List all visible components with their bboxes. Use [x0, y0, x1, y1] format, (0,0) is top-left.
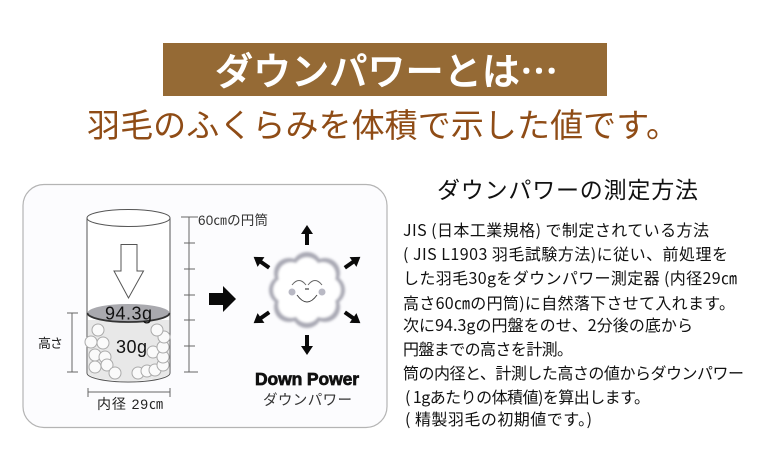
text block: description: JIS (日本工業規格) で制定されている方法	[403, 217, 709, 241]
label: height: 高さ	[38, 333, 63, 352]
icons: expansion arrows	[250, 225, 364, 355]
bracket: inner diameter	[88, 388, 170, 397]
subtitle: 羽毛のふくらみを体積で示した値です。	[87, 99, 679, 147]
text block: description: した羽毛30gをダウンパワー測定器 (内径29㎝	[403, 265, 737, 289]
label: Down Power: Down Power	[255, 369, 359, 389]
ruler: 60cm scale	[181, 217, 198, 372]
icon: outlined down arrow	[114, 244, 144, 298]
icon: big right arrow	[209, 286, 236, 312]
disc	[88, 304, 170, 324]
label: 30g: 30g	[116, 337, 147, 357]
label: 60cm cylinder: 60㎝の円筒	[198, 212, 268, 228]
text block: description: 円盤までの高さを計測。	[403, 336, 573, 360]
text block: description: ( 精製羽毛の初期値です。)	[405, 406, 592, 430]
disc: 94.3g	[105, 304, 152, 324]
text block: description: 高さ60㎝の円筒)に自然落下させて入れます。	[403, 290, 735, 314]
icon: cylinder with feathers	[85, 210, 170, 382]
label: down power katakana: ダウンパワー	[263, 389, 352, 410]
panel: measurement diagram	[23, 184, 387, 428]
label: inner diameter: 内径 29㎝	[97, 396, 163, 412]
feather balls	[85, 324, 170, 379]
text block: description: 筒の内径と、計測した高さの値からダウンパワー	[403, 360, 744, 384]
icon: smiling down cloud	[269, 252, 345, 328]
text block: description	[403, 217, 744, 430]
banner: title: ダウンパワーとは…	[215, 41, 558, 96]
bracket: height	[67, 313, 78, 372]
text block: description: ( 1gあたりの体積値)を算出します。	[405, 384, 650, 408]
text block: description: 次に94.3gの円盤をのせ、2分後の底から	[403, 312, 693, 336]
heading: measurement method: ダウンパワーの測定方法	[437, 171, 698, 205]
text block: description: ( JIS L1903 羽毛試験方法)に従い、前処理を	[403, 241, 728, 265]
